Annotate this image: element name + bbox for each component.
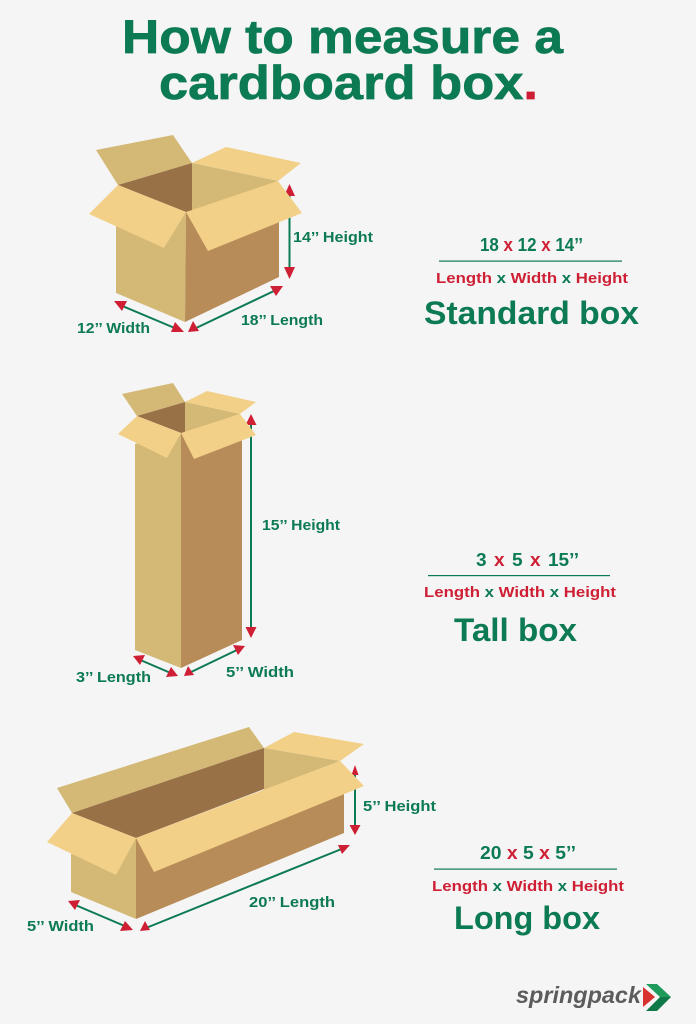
standard box name: Standard box	[424, 295, 639, 331]
long box formula: Length x Width x Height	[432, 878, 624, 895]
label: 14 height: 14’’ Height	[293, 229, 373, 246]
standard box formula: Length x Width x Height	[436, 270, 628, 287]
label: 15 height: 15’’ Height	[262, 517, 340, 534]
label: 3 length: 3’’ Length	[76, 669, 151, 686]
tall box name: Tall box	[454, 612, 577, 648]
tall box illustration	[118, 383, 256, 677]
standard box illustration	[89, 135, 302, 332]
label: 20 length: 20’’ Length	[249, 894, 335, 911]
title: How to measure a	[122, 10, 564, 63]
logo wordmark: springpack	[516, 982, 642, 1008]
label: 5 width: 5’’ Width	[226, 664, 294, 681]
arrow: 3 length	[133, 655, 178, 677]
logo arrow icon	[643, 984, 671, 1011]
label: 12 width: 12’’ Width	[77, 320, 150, 337]
standard box dimensions: 18 x 12 x 14’’	[480, 235, 583, 255]
arrow: 12 width	[114, 301, 184, 332]
title: cardboard box .	[159, 56, 538, 109]
arrow: 5 width	[68, 900, 133, 931]
label: 18 length: 18’’ Length	[241, 312, 323, 329]
long box illustration	[47, 727, 364, 931]
arrow: 20 length	[140, 845, 350, 931]
tall box formula: Length x Width x Height	[424, 584, 616, 601]
arrow: 15 height	[246, 414, 256, 638]
arrow: 5 width	[184, 645, 245, 676]
arrow: 14 height	[284, 184, 295, 279]
springpack logo	[516, 982, 671, 1011]
long box dimensions: 20 x 5 x 5’’	[480, 843, 576, 863]
arrow: 18 length	[188, 286, 283, 332]
label: 5 width: 5’’ Width	[27, 918, 94, 935]
tall box divider	[428, 575, 610, 576]
standard box divider	[439, 260, 622, 262]
tall box dimensions: 3 x 5 x 15’’	[476, 550, 579, 570]
long box divider	[434, 868, 617, 870]
long box name: Long box	[454, 900, 600, 936]
title	[122, 10, 564, 109]
arrow: 5 height	[350, 765, 360, 835]
label: 5 height: 5’’ Height	[363, 798, 436, 815]
